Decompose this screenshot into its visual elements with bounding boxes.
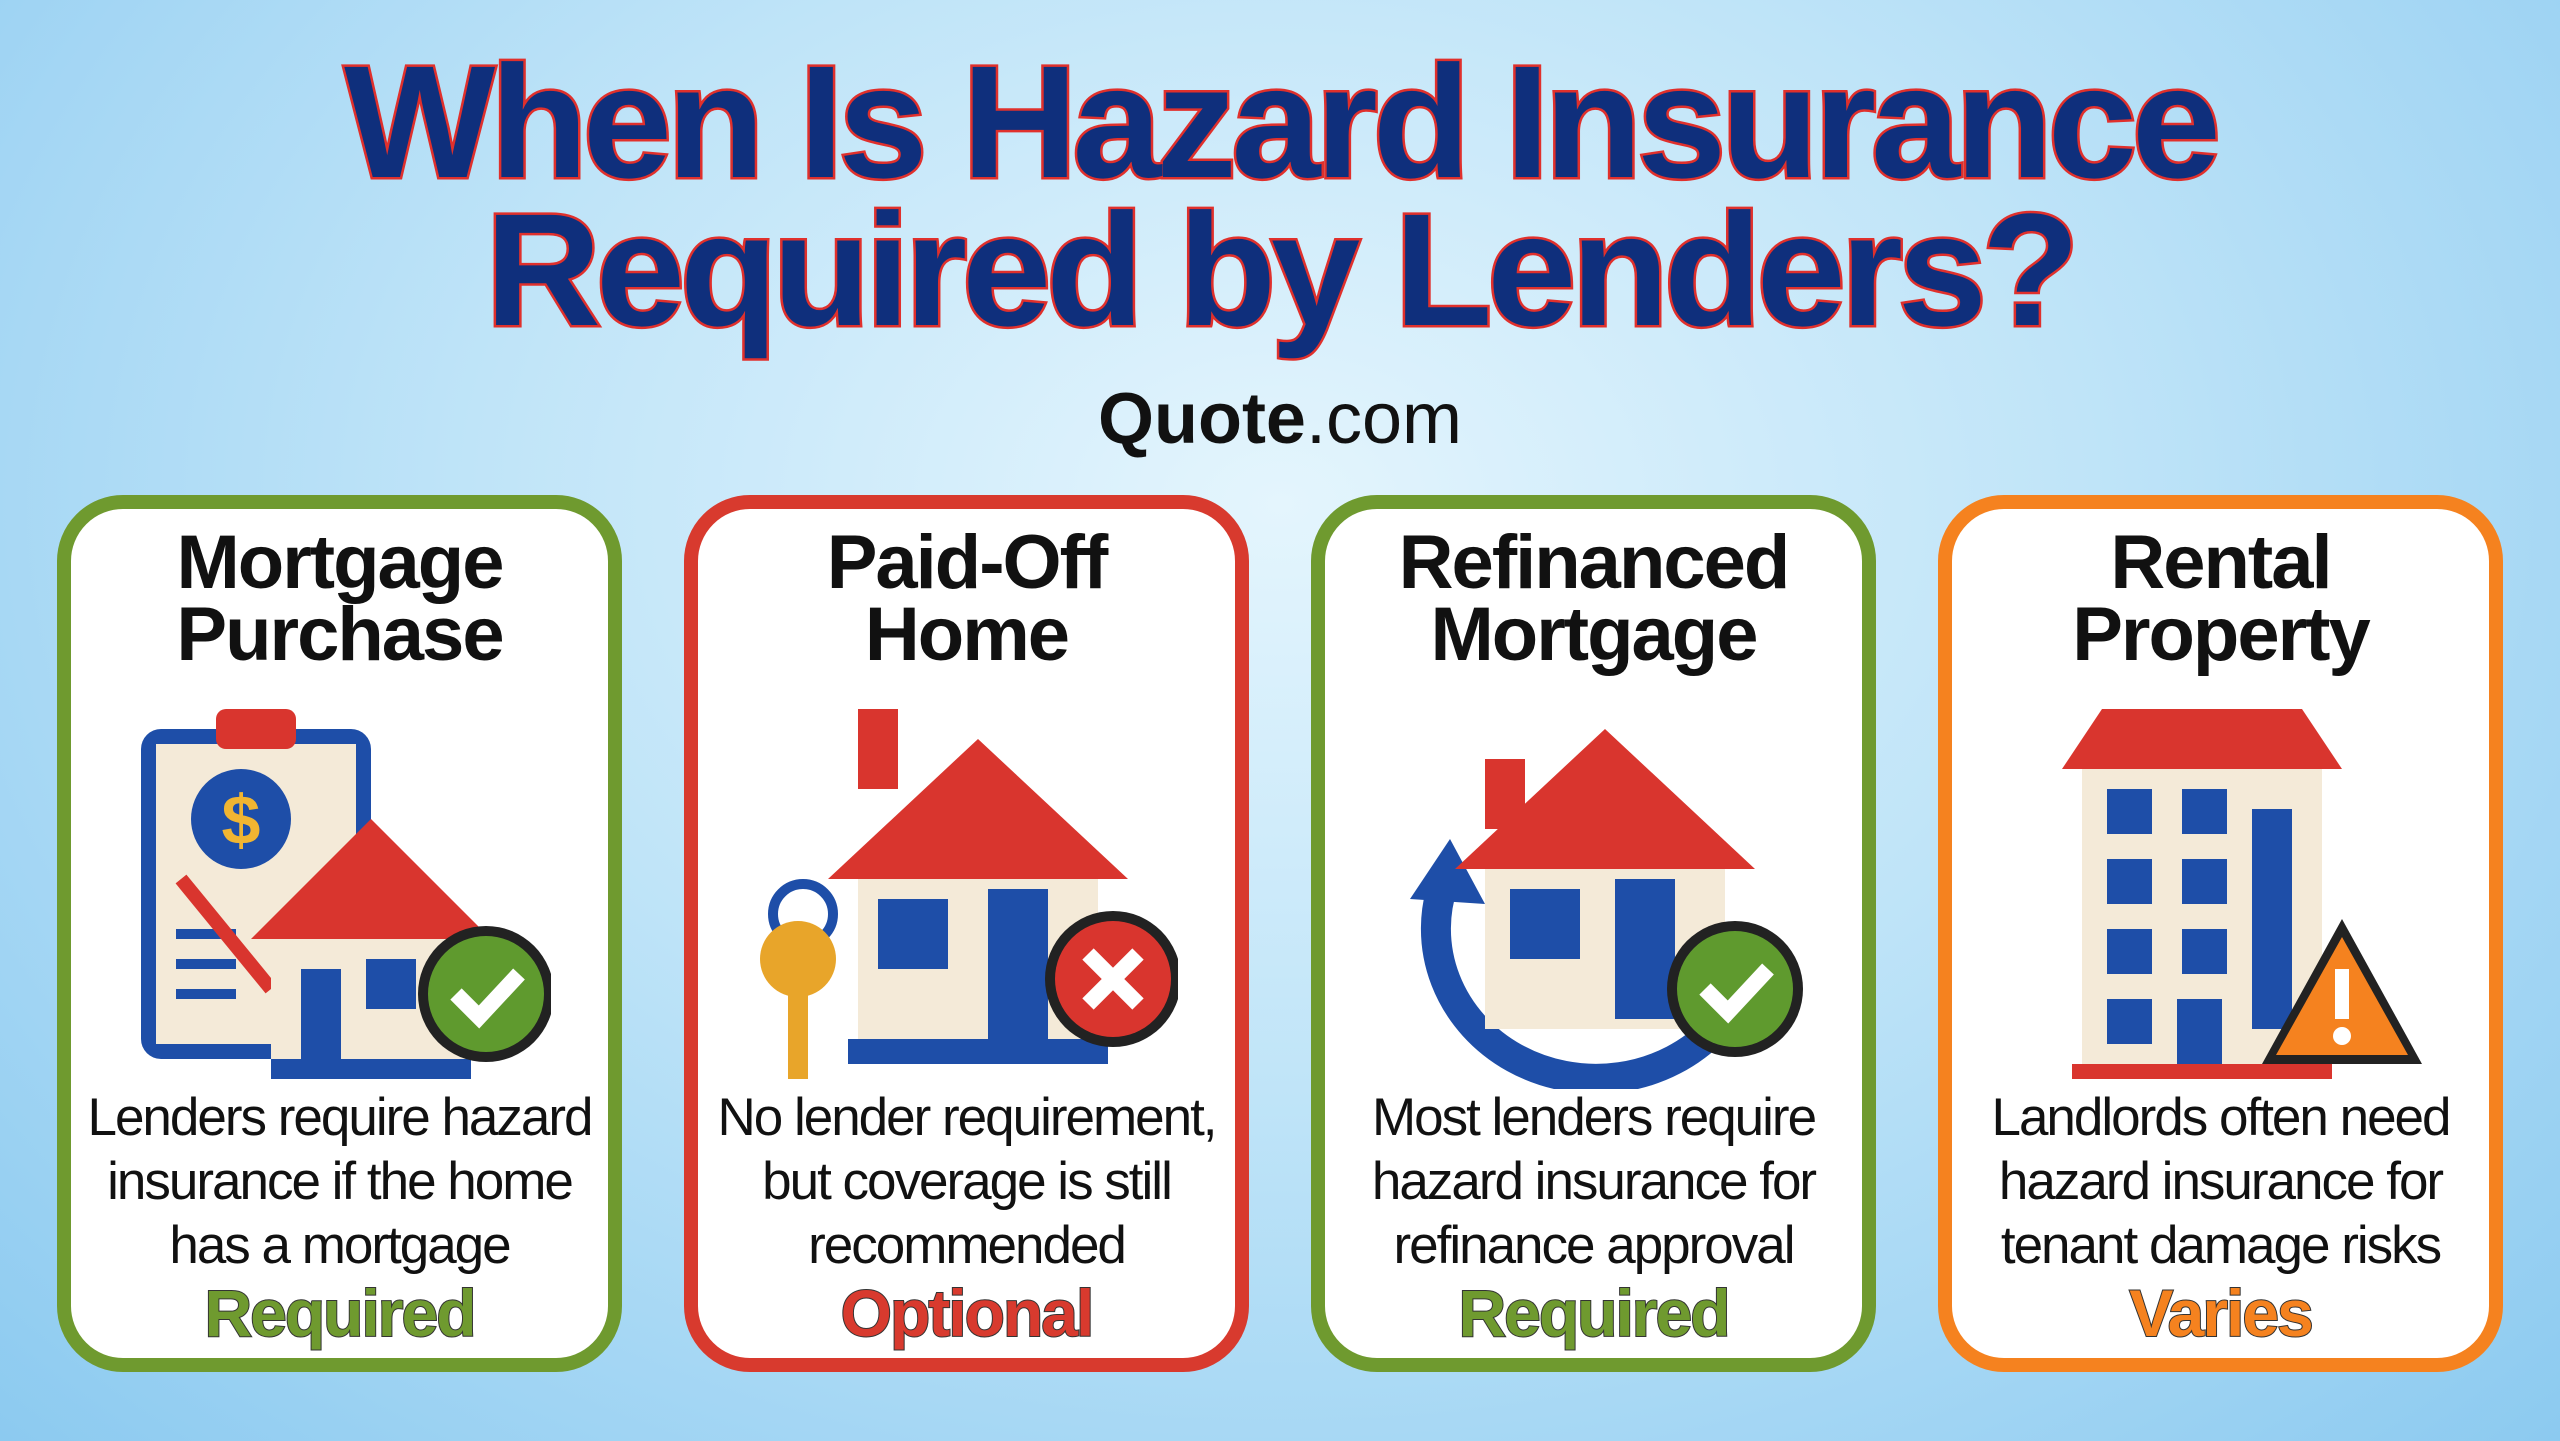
heading: Purchase [176, 592, 503, 677]
status: Optional [841, 1276, 1092, 1350]
icon: house key x [760, 709, 1178, 1079]
description: hazard insurance for [1999, 1152, 2442, 1211]
status: Required [204, 1276, 475, 1350]
description: tenant damage risks [2001, 1216, 2440, 1275]
panel: rental property [1938, 495, 2503, 1372]
heading: Refinanced [1399, 520, 1788, 605]
title [341, 32, 2218, 361]
description: refinance approval [1393, 1216, 1794, 1275]
description: No lender requirement, [717, 1088, 1216, 1147]
description: hazard insurance for [1372, 1152, 1815, 1211]
title: Required by Lenders? [485, 180, 2075, 359]
panel: mortgage purchase [57, 495, 622, 1372]
panel: refinanced mortgage [1311, 495, 1876, 1372]
description [87, 1088, 592, 1275]
description: recommended [808, 1216, 1125, 1275]
description [717, 1088, 1216, 1275]
description: but coverage is still [762, 1152, 1171, 1211]
description: insurance if the home [107, 1152, 572, 1211]
description [1372, 1088, 1816, 1275]
heading: Home [865, 592, 1068, 677]
heading: Mortgage [1430, 592, 1756, 677]
description: Most lenders require [1372, 1088, 1815, 1147]
heading [1399, 520, 1788, 677]
description: Landlords often need [1991, 1088, 2450, 1147]
description: Lenders require hazard [87, 1088, 592, 1147]
description: has a mortgage [169, 1216, 510, 1275]
heading: Paid-Off [827, 520, 1106, 605]
description [1991, 1088, 2450, 1275]
icon: clipboard house check [141, 709, 551, 1079]
heading: Mortgage [176, 520, 502, 605]
title: When Is Hazard Insurance [344, 32, 2216, 211]
heading: Property [2072, 592, 2369, 677]
icon: clipboard house check: $ [222, 781, 260, 859]
panel: paid-off home [684, 495, 1249, 1372]
status: Required [1458, 1276, 1729, 1350]
heading [2072, 520, 2370, 677]
icon: house arrow check [1410, 729, 1803, 1089]
status: Varies [2129, 1276, 2312, 1350]
heading: Rental [2110, 520, 2331, 605]
brand logo: Quote.com [1098, 379, 1462, 459]
heading [827, 520, 1108, 677]
icon: apartment warning [2062, 709, 2422, 1079]
heading [176, 520, 503, 677]
